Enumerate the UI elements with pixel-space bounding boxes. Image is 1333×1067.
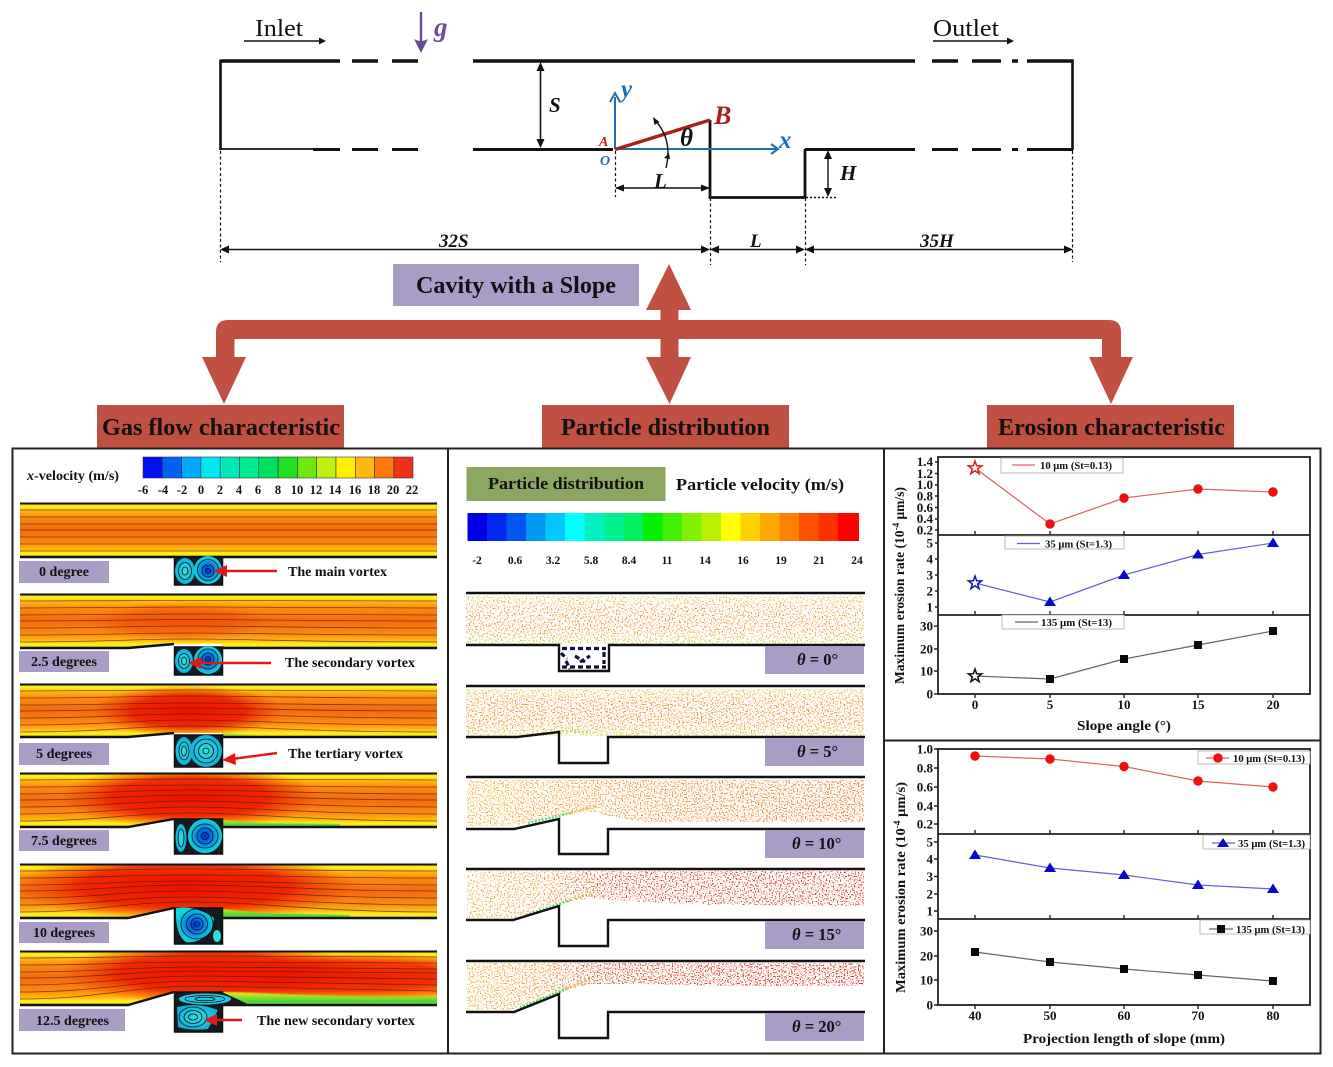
callout: the new secondary vortex: The new secondary vortex bbox=[257, 1013, 415, 1028]
flow field: 0 degree bbox=[19, 503, 437, 585]
chart: erosion rate vs projection length: 70 bbox=[1192, 1008, 1204, 1023]
legend: 135 um bbox=[1002, 615, 1124, 629]
colour bar: particle velocity: 5.8 bbox=[584, 555, 598, 567]
callout: the main vortex: The main vortex bbox=[288, 564, 387, 579]
tick labels: 1.2 bbox=[917, 466, 933, 481]
dimension: H bbox=[806, 150, 857, 198]
coordinate axes: O bbox=[600, 154, 610, 169]
label: 10 degrees: 10 degrees bbox=[33, 925, 95, 940]
label: theta = 0: θ = 0° bbox=[797, 650, 838, 669]
chart: erosion rate vs slope angle: 10 bbox=[1118, 697, 1130, 712]
tick labels: 1 bbox=[926, 600, 933, 614]
series: 35 um bbox=[968, 538, 1279, 606]
y axis title: μm/s) bbox=[892, 487, 907, 523]
green tag: particle distribution: Particle distribution bbox=[488, 474, 644, 493]
title box: cavity with a slope: Cavity with a Slope bbox=[416, 273, 616, 299]
legend: 10 um: 10 μm (St=0.13) bbox=[1040, 461, 1113, 472]
outlet label and arrow bbox=[933, 16, 1014, 44]
series: 10 um bbox=[968, 461, 1278, 529]
red slope AB: B bbox=[713, 101, 731, 130]
tick labels: 5 bbox=[926, 834, 934, 850]
colour bar: x-velocity: 6 bbox=[255, 483, 261, 497]
tick labels: 0.8 bbox=[917, 760, 934, 776]
branching red arrows bbox=[202, 264, 1133, 404]
legend: 10 um bbox=[1001, 458, 1123, 473]
schematic: channel geometry with cavity and slope bbox=[220, 12, 1073, 265]
series: 135 um bbox=[971, 948, 1277, 985]
callout: the secondary vortex: The secondary vortex bbox=[285, 655, 415, 670]
tick labels: 0.4 bbox=[917, 798, 934, 814]
inlet label and arrow: Inlet bbox=[255, 16, 303, 42]
tick labels bbox=[917, 742, 934, 1012]
label: 12.500 degrees bbox=[19, 1009, 125, 1031]
label: theta = 0 bbox=[765, 646, 864, 674]
legend: 35 um: 35 μm (St=1.3) bbox=[1238, 839, 1306, 850]
slope angle theta bbox=[653, 117, 693, 168]
colour bar: particle velocity: 0.6 bbox=[508, 555, 522, 567]
chart: erosion rate vs projection length: 60 bbox=[1118, 1008, 1130, 1023]
colour bar: particle velocity: 24 bbox=[851, 555, 863, 567]
panel: gas flow characteristic bbox=[19, 456, 438, 1033]
colour bar: x-velocity: 10 bbox=[291, 483, 303, 497]
callout: the secondary vortex bbox=[188, 655, 415, 670]
coordinate axes: y bbox=[618, 76, 633, 103]
tick labels: 30 bbox=[920, 618, 933, 634]
tick labels: 1 bbox=[926, 904, 933, 918]
tick labels: 0.6 bbox=[917, 500, 934, 515]
colour bar: particle velocity: 21 bbox=[813, 555, 825, 567]
tick labels: 2 bbox=[926, 584, 933, 598]
chart: erosion rate vs slope angle: 0 bbox=[972, 697, 978, 712]
series: 135 um bbox=[968, 627, 1277, 683]
label: 2.5 degrees bbox=[19, 651, 109, 672]
tick labels: 0 bbox=[926, 998, 933, 1012]
chart: erosion rate vs projection length: 50 bbox=[1044, 1008, 1056, 1023]
flow field: 12.500 degrees bbox=[19, 950, 438, 1033]
label: theta = 20 bbox=[765, 1013, 864, 1041]
tick labels: 2 bbox=[926, 886, 933, 902]
heading: gas flow characteristic bbox=[97, 405, 344, 448]
tick labels: 0.6 bbox=[917, 780, 934, 794]
label: 7.5 degrees bbox=[19, 830, 109, 851]
outlet label and arrow: Outlet bbox=[933, 16, 999, 42]
label: theta = 10: θ = 10° bbox=[792, 834, 841, 853]
label: theta = 20: θ = 20° bbox=[792, 1017, 841, 1036]
tick labels: 20 bbox=[920, 642, 933, 656]
flow field: 5 degrees bbox=[19, 684, 437, 767]
tick labels: 3 bbox=[926, 568, 934, 582]
series: 35 um bbox=[969, 850, 1279, 893]
axes and ticks bbox=[934, 749, 1310, 1009]
colour bar: x-velocity: 8 bbox=[275, 483, 281, 497]
dimension: S: S bbox=[549, 93, 561, 117]
tick labels: 20 bbox=[920, 948, 933, 964]
tick labels: 4 bbox=[926, 552, 934, 566]
legend: 10 um: 10 μm (St=0.13) bbox=[1233, 754, 1306, 765]
green tag: particle distribution bbox=[466, 467, 666, 501]
label: 7.5 degrees: 7.5 degrees bbox=[31, 833, 97, 848]
colour bar: x-velocity: 18 bbox=[368, 483, 380, 497]
y axis title: Maximum erosion rate (10 bbox=[892, 531, 907, 684]
tick labels: 1.4 bbox=[917, 454, 934, 469]
coordinate axes: A bbox=[598, 135, 608, 150]
colour bar: particle velocity bbox=[468, 513, 863, 567]
tick labels bbox=[917, 454, 934, 702]
colour bar: particle velocity: 16 bbox=[737, 555, 749, 567]
label: theta = 15: θ = 15° bbox=[792, 925, 841, 944]
label: 12.500 degrees: 12.5 degrees bbox=[36, 1013, 109, 1028]
tick labels: 0.2 bbox=[917, 522, 933, 538]
chart: erosion rate vs projection length bbox=[892, 742, 1310, 1047]
tick labels: 0.2 bbox=[917, 816, 933, 832]
heading: erosion characteristic: Erosion characteristic bbox=[998, 415, 1225, 441]
title box: cavity with a slope bbox=[393, 264, 639, 306]
particle field: theta 0 bbox=[466, 593, 865, 674]
x axis title: Slope angle (°) bbox=[1077, 718, 1171, 733]
particle field: theta 5 bbox=[466, 686, 865, 766]
slope angle theta: θ bbox=[680, 125, 693, 152]
y axis title: Maximum erosion rate (10 bbox=[894, 834, 909, 993]
tick labels: 10 bbox=[920, 972, 933, 988]
x-velocity label: x-velocity (m/s) bbox=[26, 468, 119, 483]
tick labels: 0.4 bbox=[917, 511, 934, 526]
tick labels: 0.8 bbox=[917, 488, 934, 504]
axes and ticks bbox=[934, 457, 1310, 698]
heading: erosion characteristic bbox=[987, 405, 1234, 448]
heading: particle distribution: Particle distribution bbox=[561, 415, 770, 441]
channel walls bbox=[220, 60, 1073, 198]
overall dimensions bbox=[220, 231, 1073, 254]
legend: 135 um: 135 μm (St=13) bbox=[1236, 925, 1306, 936]
y axis title: -4 bbox=[891, 522, 901, 530]
chart: erosion rate vs projection length: 40 bbox=[968, 1008, 982, 1023]
callout: the main vortex bbox=[214, 564, 387, 579]
colour bar: particle velocity: 19 bbox=[775, 555, 787, 567]
chart: erosion rate vs slope angle: 5 bbox=[1047, 697, 1054, 712]
label: 0 degree bbox=[19, 561, 109, 583]
tick labels: 1.0 bbox=[917, 742, 933, 756]
colour bar: x-velocity: 12 bbox=[310, 483, 322, 497]
colour bar: particle velocity: -2 bbox=[472, 555, 482, 567]
series: 10 um bbox=[970, 751, 1278, 792]
flow field: 10 degrees bbox=[19, 864, 437, 945]
label: theta = 15 bbox=[765, 921, 864, 949]
tick labels: 5 bbox=[926, 536, 934, 550]
label: 5 degrees: 5 degrees bbox=[36, 746, 92, 761]
dimension: L bbox=[615, 169, 710, 193]
label: theta = 5 bbox=[765, 738, 864, 766]
heading: particle distribution bbox=[542, 405, 789, 448]
colour bar: particle velocity: 14 bbox=[699, 555, 711, 567]
label: theta = 10 bbox=[765, 830, 864, 858]
legend: 35 um: 35 μm (St=1.3) bbox=[1045, 540, 1113, 550]
colour bar: x-velocity bbox=[138, 457, 418, 497]
heading: gas flow characteristic: Gas flow characteristic bbox=[102, 415, 340, 441]
tick labels: 1.0 bbox=[917, 477, 933, 492]
overall dimensions: L bbox=[749, 231, 762, 252]
dimension: H: H bbox=[839, 161, 857, 185]
y axis title: -4 bbox=[892, 820, 902, 828]
tick labels: 10 bbox=[920, 664, 933, 678]
colour bar: particle velocity: 8.4 bbox=[622, 555, 636, 567]
legend: 35 um bbox=[1203, 835, 1310, 850]
flow field: 2.5 degrees bbox=[19, 594, 437, 675]
tick labels: 30 bbox=[920, 924, 933, 938]
chart: erosion rate vs slope angle: 15 bbox=[1192, 697, 1205, 712]
gravity arrow: g bbox=[433, 12, 448, 42]
colour bar: x-velocity: -2 bbox=[177, 483, 187, 497]
chart: erosion rate vs projection length: 80 bbox=[1266, 1008, 1280, 1023]
particle field: theta 20 bbox=[466, 961, 865, 1041]
inlet label and arrow bbox=[244, 16, 326, 44]
panel frame bbox=[12, 448, 1320, 1054]
particle field: theta 10 bbox=[466, 777, 865, 858]
label: theta = 5: θ = 5° bbox=[797, 742, 838, 761]
label: particle velocity: Particle velocity (m/s) bbox=[676, 475, 844, 494]
label: 10 degrees bbox=[19, 922, 109, 943]
x axis title: Projection length of slope (mm) bbox=[1023, 1032, 1225, 1047]
colour bar: x-velocity: 22 bbox=[406, 483, 418, 497]
colour bar: x-velocity: 16 bbox=[349, 483, 361, 497]
particle field: theta 15 bbox=[466, 869, 865, 949]
colour bar: x-velocity: -4 bbox=[158, 483, 169, 497]
legend: 35 um bbox=[1005, 536, 1124, 550]
dimension: S bbox=[536, 62, 561, 148]
tick labels: 0 bbox=[926, 686, 933, 702]
tick labels: 4 bbox=[926, 852, 934, 866]
colour bar: x-velocity: 14 bbox=[329, 483, 342, 497]
callout: the tertiary vortex bbox=[222, 746, 403, 765]
coordinate axes bbox=[598, 76, 792, 169]
dimension: L: L bbox=[653, 169, 667, 193]
colour bar: x-velocity: 20 bbox=[387, 483, 399, 497]
colour bar: x-velocity: 4 bbox=[236, 483, 243, 497]
legend: 10 um bbox=[1198, 751, 1310, 765]
overall dimensions: 35H bbox=[919, 231, 955, 252]
coordinate axes: x bbox=[778, 127, 792, 154]
label: 2.5 degrees: 2.5 degrees bbox=[31, 654, 97, 669]
legend: 135 um bbox=[1200, 920, 1310, 936]
red slope AB bbox=[615, 101, 731, 150]
colour bar: x-velocity: 2 bbox=[217, 483, 223, 497]
overall dimensions: 32S bbox=[438, 231, 469, 252]
callout: the tertiary vortex: The tertiary vortex bbox=[288, 746, 403, 761]
label: 0 degree: 0 degree bbox=[39, 564, 89, 579]
chart: erosion rate vs slope angle: 20 bbox=[1266, 697, 1280, 712]
colour bar: x-velocity: 0 bbox=[198, 483, 204, 497]
panel: particle distribution bbox=[466, 467, 865, 1041]
dotted extension lines bbox=[220, 151, 1072, 265]
legend: 135 um: 135 μm (St=13) bbox=[1041, 618, 1113, 629]
tick labels: 3 bbox=[926, 869, 934, 884]
y axis title: μm/s) bbox=[894, 782, 909, 821]
colour bar: particle velocity: 3.2 bbox=[546, 555, 560, 567]
label: 5 degrees bbox=[19, 743, 109, 765]
colour bar: particle velocity: 11 bbox=[662, 555, 673, 567]
flow field: 7.5 degrees bbox=[19, 765, 437, 854]
gravity arrow bbox=[414, 12, 448, 53]
colour bar: x-velocity: -6 bbox=[138, 483, 148, 497]
chart: erosion rate vs slope angle bbox=[891, 454, 1310, 733]
